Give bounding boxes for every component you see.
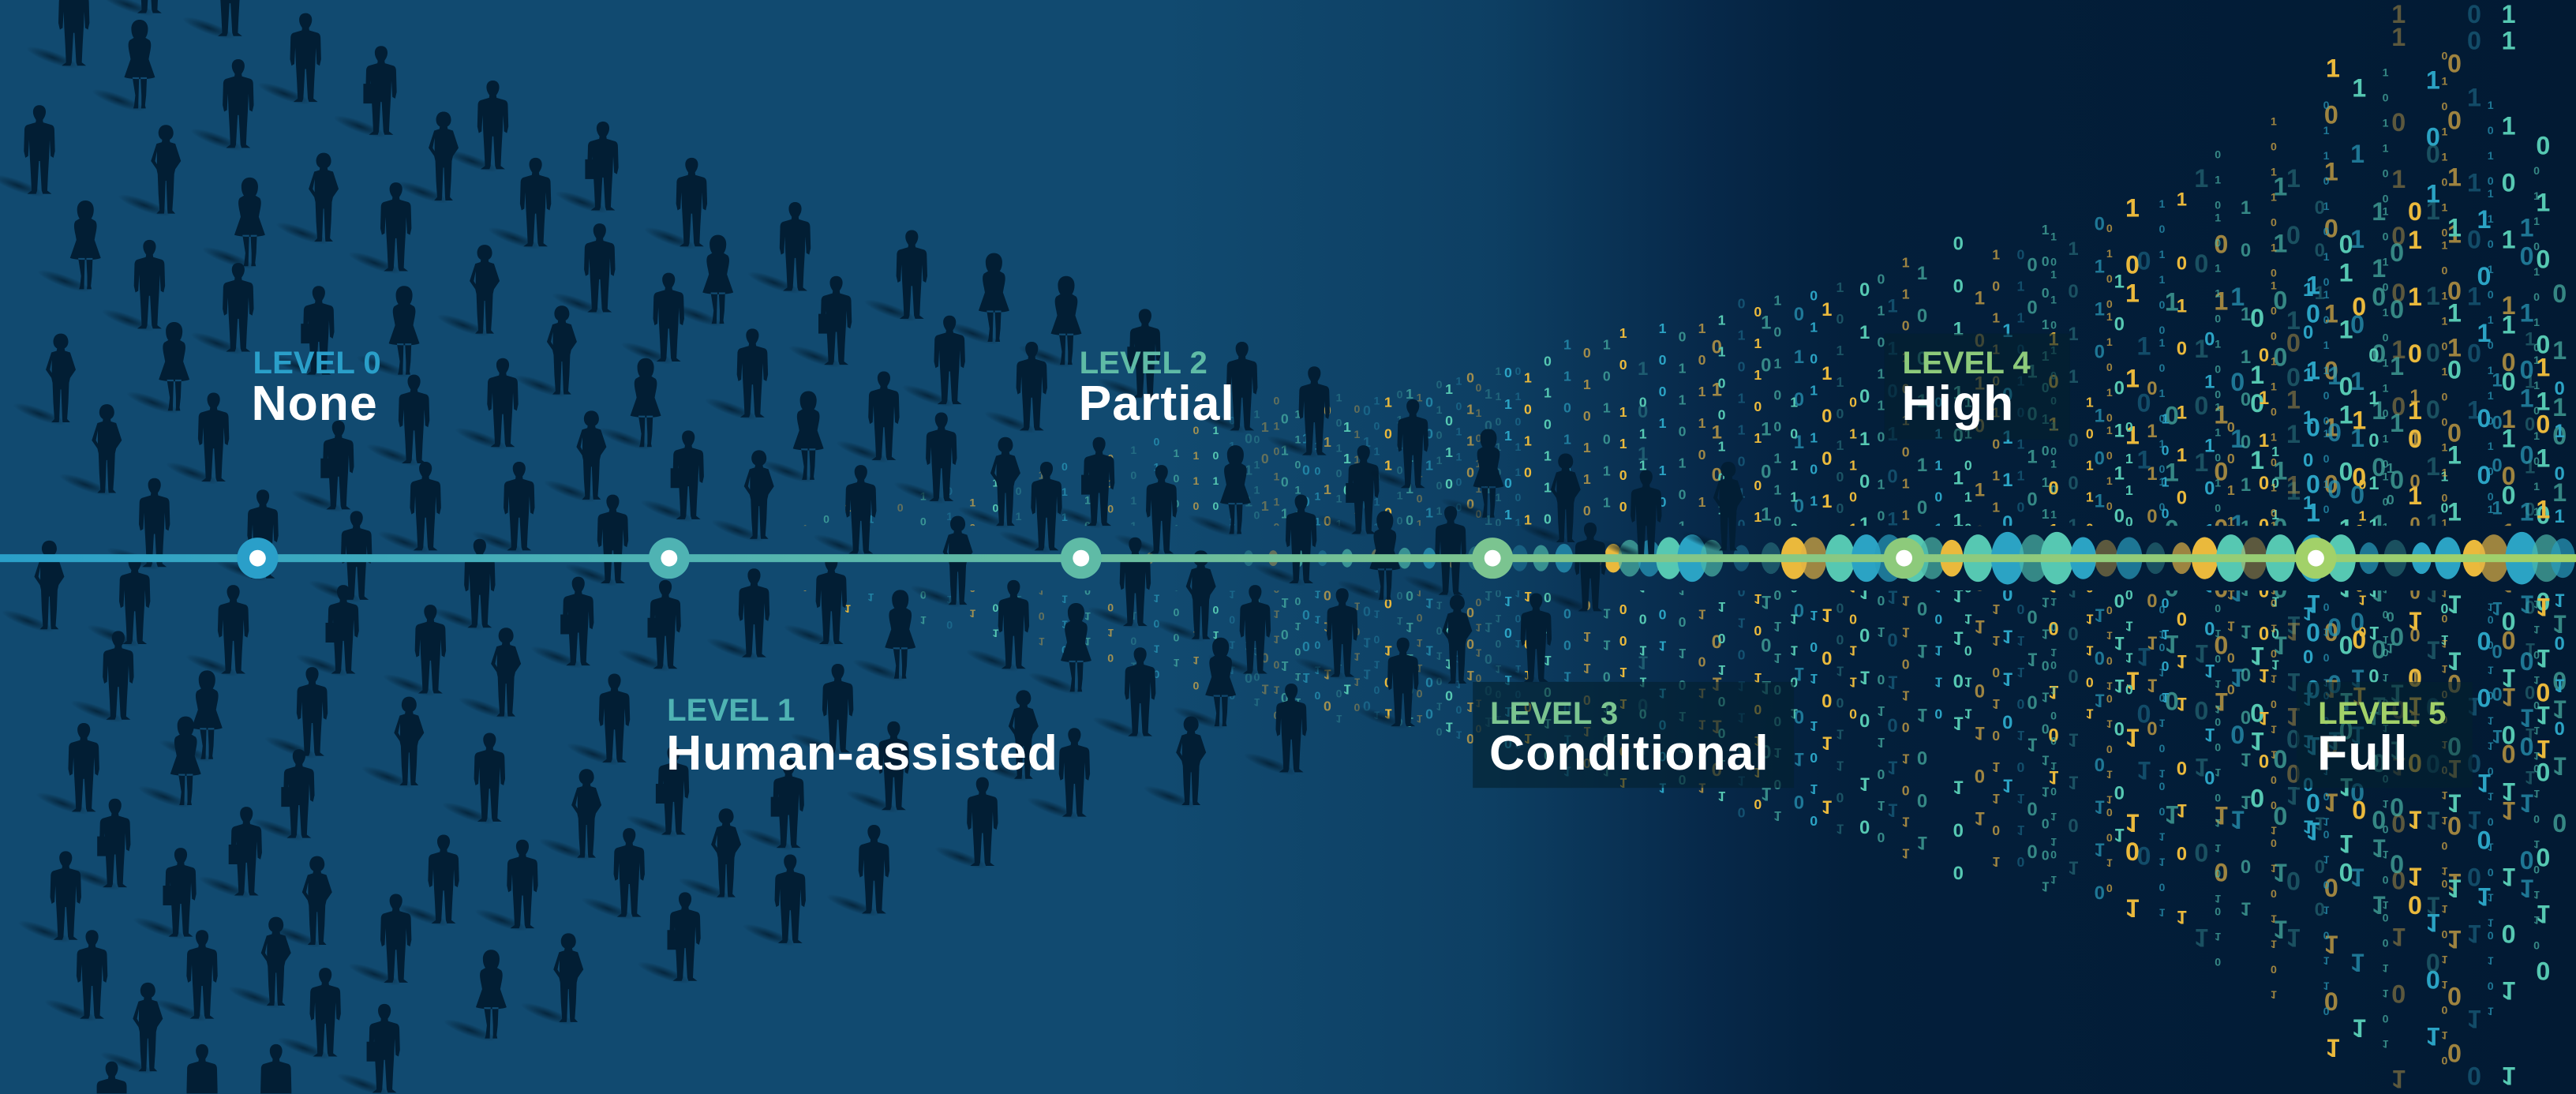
binary data stream: upper half columns of digits: 1 0 1 0 1 — [2529, 354, 2557, 638]
binary data stream: upper half columns of digits: 01 1 0 10 1 — [2401, 197, 2429, 510]
binary data stream: upper half columns of digits: 1 0 1 0 — [1035, 468, 1048, 556]
binary data stream: upper half columns of digits: 0 1 0 0 1 1 0 0 1 — [2529, 132, 2557, 643]
binary data stream: upper half columns of digits: 1 1 0 1 0 1 0 1 1 0 1 0 — [1898, 255, 1914, 618]
binary data stream: upper half columns of digits: 1 1 0 1 0 1 0 — [1291, 407, 1304, 571]
label: level 4 high: High — [1901, 376, 2014, 431]
binary data stream: upper half columns of digits: 0 1 — [773, 529, 785, 567]
binary data stream: upper half columns of digits: 0 1 1 0 1 — [2199, 328, 2220, 541]
timeline node: level 2 — [1061, 538, 1102, 579]
binary data stream: upper half columns of digits: 1 0 0 1 1 0 1 0 — [1481, 386, 1496, 623]
binary data stream: upper half columns of digits: 1 0 1 1 0 1 01 0 0 1 1 0 1 0 1 01 1 0 1 0 1 0 1 0 — [2267, 115, 2280, 734]
binary data stream: upper half columns of digits: 1 1 0 1 1 0 1 0 1 — [2495, 26, 2523, 566]
binary data stream: upper half columns of digits: 0 1 1 0 1 0 1 01 0 1 1 0 01 0 1 0 1 1 0 1 0 1 1 0 1 — [2320, 99, 2333, 743]
binary data stream: upper half columns of digits: 0 1 0 1 1 0 1 — [1270, 395, 1282, 559]
binary data stream: upper half columns of digits: 0 10 1 0 — [2243, 304, 2271, 560]
binary data stream: upper half columns of digits: 0 1 1 0 1 0 1 — [1350, 403, 1363, 567]
binary data stream: upper half columns of digits: 1 0 1 0 1 0 1 — [2187, 164, 2215, 619]
binary data stream: upper half columns of digits: 1 0 1 — [2267, 444, 2283, 523]
binary data stream: upper half columns of digits: 1 0 1 — [841, 501, 854, 564]
binary data stream: upper half columns of digits: 1 0 1 0 1 1 0 — [1370, 395, 1383, 559]
binary data stream: upper half columns of digits: 1 1 0 1 0 0 1 1 0 — [1559, 337, 1575, 605]
binary data stream: upper half columns of digits: 1 0 1 1 0 0 1 1 0 1 — [1616, 325, 1631, 641]
binary data stream: upper half columns of digits: 1 0 1 0 1 0 1 1 — [1520, 369, 1536, 622]
binary data stream: upper half columns of digits: 1 0 1 1 0 1 — [1250, 407, 1263, 546]
binary data stream: upper half columns of digits: 0 1 10 1 0 — [2545, 279, 2574, 564]
binary data stream: digits reaching the top edge: 1 — [2495, 0, 2523, 28]
binary data stream: upper half columns of digits: 0 1 1 0 1 — [1241, 430, 1256, 572]
binary data stream: upper half columns of digits: 1 0 1 0 1 0 — [2495, 263, 2523, 604]
binary data stream: upper half columns of digits: 1 0 1 1 0 1 0 1 — [1402, 386, 1417, 623]
label: level 5 full: LEVEL 5 — [2318, 695, 2446, 731]
binary data stream: upper half columns of digits: 10 1 01 0 1 — [2513, 214, 2541, 526]
label: level 5 full: Full — [2317, 725, 2408, 781]
binary data stream: upper half columns of digits: 0 1 0 1 0 — [2130, 246, 2159, 559]
binary data stream: upper half columns of digits: 0 1 1 0 — [2121, 419, 2137, 530]
binary data stream: upper half columns of digits: 1 0 1 0 1 1 — [1209, 424, 1222, 563]
binary data stream: upper half columns of digits: 1 0 1 0 1 1 0 — [1380, 395, 1396, 616]
binary data stream: upper half columns of digits: 1 0 1 1 0 01 0 1 0 1 0 1 1 0 1 01 0 1 1 0 1 0 1 0 1 1 0 — [2379, 66, 2392, 760]
binary data stream: upper half columns of digits: 1 0 1 0 — [2158, 410, 2174, 521]
binary data stream: upper half columns of digits: 1 — [2319, 54, 2347, 83]
binary data stream: upper half columns of digits: 0 1 1 0 1 0 1 1 — [1500, 365, 1516, 617]
binary data stream: upper half columns of digits: 1 0 1 0 1 — [2158, 287, 2186, 600]
binary data stream: upper half columns of digits: 1 0 0 1 1 — [1170, 447, 1182, 560]
binary data stream: upper half columns of digits: 1 0 0 1 1 0 1 — [2109, 271, 2130, 569]
binary data stream: upper half columns of digits: 0 1 1 — [1013, 485, 1025, 548]
binary data stream: upper half columns of digits: 1 0 1 1 0 — [1997, 320, 2018, 534]
binary data stream: upper half columns of digits: 1 0 1 1 0 — [1127, 444, 1140, 557]
binary data stream: upper half columns of digits: 0 1 0 01 1 0 1 01 0 1 0 1 1 0 1 1 0 1 — [2103, 222, 2116, 689]
binary data stream: upper half columns of digits: 1 0 1 1 0 1 1 — [2297, 279, 2319, 556]
binary data stream: upper half columns of digits: 1 0 0 1 1 0 — [1298, 430, 1314, 604]
binary data stream: upper half columns of digits: 1 0 1 0 — [989, 477, 1002, 565]
binary data stream: upper half columns of digits: 1 01 1 1 — [2118, 194, 2147, 450]
binary data stream: upper half columns of digits: 0 0 1 1 0 1 0 1 1 — [2383, 238, 2411, 750]
binary data stream: upper half columns of digits: 1 0 1 0 1 1 0 1 0 — [1599, 337, 1615, 621]
binary data stream: upper half columns of digits: 1 0 1 0 0 1 0 — [2384, 23, 2413, 421]
binary data stream: upper half columns of digits: 1 0 1 0 1 1 0 1 — [1333, 391, 1346, 580]
binary data stream: upper half columns of digits: 1 1 0 1 0 1 — [1882, 296, 1904, 530]
binary data stream: upper half columns of digits: 0 1 0 1 1 1 — [1150, 436, 1163, 575]
binary data stream: upper half columns of digits: 1 0 1 1 0 1 0 1 1 0 1 — [1988, 246, 2004, 578]
binary data stream: upper half columns of digits: 0 1 1 0 — [1058, 460, 1071, 549]
binary data stream: upper half columns of digits: 1 0 1 0 1 0 — [1969, 287, 1990, 543]
binary data stream: upper half columns of digits: 0 1 1 0 1 0 1 — [1320, 403, 1335, 624]
binary data stream: upper half columns of digits: 1 0 — [864, 512, 877, 550]
binary data stream: upper half columns of digits: 0 1 1 — [943, 485, 956, 548]
binary data stream: upper half columns of digits: 1 0 1 1 — [2223, 283, 2252, 538]
binary data stream: upper half columns of digits: 1 1 0 0 1 0 1 0 1 — [2266, 173, 2294, 713]
binary data stream: upper half columns of digits: 0 1 1 0 1 0 1 0 1 1 — [1675, 328, 1690, 628]
binary data stream: upper half columns of digits: 0 1 1 0 1 0 1 1 — [1359, 403, 1375, 639]
binary data stream: upper half columns of digits: 0 1 0 1 1 0 1 0 1 — [1540, 354, 1556, 638]
label: level 0 none: LEVEL 0 — [253, 345, 381, 380]
label: level 2 partial: Partial — [1079, 376, 1235, 431]
binary data stream: upper half columns of digits: 0 1 — [2354, 477, 2370, 524]
binary data stream: upper half columns of digits: 0 1 0 1 1 0 1 0 1 1 0 — [1734, 296, 1750, 628]
binary data stream: upper half columns of digits: 0 1 1 0 — [1706, 337, 1728, 486]
binary data stream: upper half columns of digits: 0 0 1 0 1 0 1 — [2021, 255, 2042, 553]
binary data stream: upper half columns of digits: 0 1 1 0 1 0 — [1189, 424, 1202, 563]
binary data stream: upper half columns of digits: 1 0 0 1 0 — [2487, 369, 2508, 561]
binary data stream: upper half columns of digits: 0 1 — [820, 512, 833, 550]
binary data stream: upper half columns of digits: 1 0 1 1 0 — [2082, 395, 2098, 537]
binary data stream: upper half columns of digits: 0 1 1 0 0 1 — [2207, 230, 2235, 599]
binary data stream: upper half columns of digits: 1 01 1 0 1 0 0 1 01 0 1 1 1 0 1 0 1 1 01 — [2047, 230, 2060, 735]
binary data stream: upper half columns of digits: 0 1 1 0 0 1 0 1 — [1462, 369, 1478, 606]
binary data stream: upper half columns of digits: 0 1 0 1 0 1 0 1 0 0 1 — [2317, 73, 2346, 755]
binary data stream: upper half columns of digits: 0 1 1 — [894, 501, 907, 564]
timeline node: level 4 — [1884, 538, 1925, 579]
binary data stream: upper half columns of digits: 0 1 0 1 1 0 1 1 0 1 0 — [1806, 287, 1822, 635]
binary data stream: upper half columns of digits: 0 1 1 0 1 0 1 — [1394, 388, 1406, 552]
label: level 3 conditional — [1473, 682, 1794, 788]
binary data stream: upper half columns of digits: 0 1 1 0 0 — [2253, 345, 2275, 537]
binary data stream: upper half columns of digits: 1 0 1 1 0 0 1 0 — [1452, 375, 1465, 564]
binary data stream: upper half columns of digits: 0 1 1 0 — [2141, 378, 2162, 527]
binary data stream: upper half columns of digits: 1 0 1 0 1 — [2043, 328, 2065, 541]
label: level 2 partial: LEVEL 2 — [1080, 345, 1208, 380]
binary data stream: digits reaching the top edge: 0 — [2460, 0, 2488, 28]
timeline node: level 1 — [649, 538, 690, 579]
binary data stream: upper half columns of digits: 1 1 0 1 0 1 0 1 — [1492, 365, 1504, 554]
binary data stream: upper half columns of digits: 0 1 0 1 1 — [1104, 451, 1117, 565]
binary data stream: upper half columns of digits: 1 — [2345, 74, 2373, 131]
glowing data bubbles along the timeline — [1081, 532, 2575, 584]
binary data stream: upper half columns of digits: 0 0 1 1 0 1 1 — [1421, 395, 1437, 616]
timeline node: level 3 — [1472, 538, 1513, 579]
binary data stream: upper half columns of digits: 0 1 0 1 1 — [2363, 345, 2384, 537]
binary data stream: upper half columns of digits: 1 0 0 1 1 0 1 0 1 1 0 1 — [2038, 222, 2054, 585]
binary data stream: upper half columns of digits: 1 0 1 1 0 1 0 0 1 1 1 — [1832, 279, 1848, 611]
binary data stream: upper half columns of digits: 1 0 1 — [2383, 460, 2398, 539]
label: level 2 partial — [1079, 345, 1235, 431]
binary data stream: upper half columns of digits: 1 0 1 0 1 1 0 1 — [2279, 164, 2308, 619]
binary data stream: upper half columns of digits: 1 1 0 0 1 — [1816, 299, 1837, 512]
binary data stream: upper half columns of digits: 0 1 0 1 1 0 1 1 0 — [1579, 345, 1595, 613]
binary data stream: upper half columns of digits: 1 0 0 1 1 — [2320, 362, 2349, 617]
crowd of people silhouettes — [0, 0, 1743, 1094]
binary data stream: digits reaching the top edge: 1 — [2384, 0, 2413, 28]
binary data stream: upper half columns of digits: 0 0 1 1 0 1 1 0 — [1948, 234, 1969, 575]
binary data stream: upper half columns of digits: 1 0 1 0 1 1 — [1755, 313, 1777, 568]
binary data stream: upper half columns of digits: 0 0 1 — [2309, 197, 2331, 325]
binary data stream: upper half columns of digits: 0 1 0 1 0 1 — [1788, 304, 1810, 560]
binary data stream: upper half columns of digits: 0 1 0 1 1 0 1 1 — [1511, 365, 1524, 554]
binary data stream: upper half columns of digits: 1 0 1 — [1632, 358, 1653, 465]
binary data stream: upper half columns of digits: 1 0 1 1 0 1 0 — [1413, 391, 1426, 555]
binary data stream: upper half columns of digits: 0 1 0 1 1 0 — [1311, 414, 1324, 553]
binary data stream: upper half columns of digits: 0 1 1 0 1 0 1 1 — [2089, 214, 2110, 555]
binary data stream: upper half columns of digits: 0 1 1 0 0 1 1 1 0 — [2419, 140, 2447, 651]
label: level 3 conditional: Conditional — [1489, 725, 1769, 781]
label: level 1 human-assisted: Human-assisted — [666, 725, 1058, 781]
binary data stream: upper half columns of digits: 1 1 0 1 — [1081, 468, 1094, 556]
binary data stream: upper half columns of digits: 1 10 0 1 0 1 1 — [2364, 197, 2393, 595]
binary data stream: upper half columns of digits: 0 1 1 0 1 0 1 — [1226, 414, 1238, 579]
binary data stream: digits reaching the top edge — [2384, 0, 2523, 28]
binary data stream: upper half columns of digits: 0 1 0 1 — [2549, 378, 2570, 527]
binary data stream: upper half columns of digits: 0 1 0 1 0 1 1 0 — [1433, 378, 1446, 568]
label: level 5 full — [2297, 682, 2473, 788]
binary data stream: upper half columns of digits: 1 1 0 1 1 0 1 — [2440, 214, 2469, 640]
binary data stream: upper half columns of digits: 1 1 0 1 0 — [1960, 395, 1976, 537]
label: level 4 high — [1885, 334, 2070, 440]
binary data stream: upper half columns of digits: 1 1 0 1 1 0 0 — [2343, 140, 2372, 566]
binary data stream: upper half columns of digits: 1 0 1 0 0 — [2469, 205, 2498, 489]
label: level 3 conditional: LEVEL 3 — [1490, 695, 1618, 731]
binary data stream: upper half columns of digits: 1 0 1 — [917, 489, 930, 553]
binary data stream: upper half columns of digits: 0 1 0 1 1 0 0 — [1277, 410, 1293, 616]
binary data stream: upper half columns of digits: 1 0 1 1 0 — [1786, 395, 1802, 537]
binary data stream: upper half columns of digits: 1 1 0 0 — [2405, 386, 2425, 535]
binary data stream: upper half columns of digits: 1 0 1 0 1 1 0 1 1 — [2171, 189, 2192, 594]
binary data stream: upper half columns of digits: 1 0 1 0 1 0 — [1257, 419, 1273, 609]
binary data stream: upper half columns of digits: 1 0 1 — [966, 496, 979, 560]
binary data stream: upper half columns of digits: 0 1 0 1 0 1 — [1854, 279, 1875, 535]
binary data stream: upper half columns of digits — [773, 23, 2574, 769]
binary data stream: upper half columns of digits: 1 1 0 1 0 1 — [1339, 419, 1355, 609]
binary data stream: upper half columns of digits: 10 1 0 01 1 — [2299, 271, 2327, 583]
binary data stream: upper half columns of digits: 1 0 1 — [2419, 66, 2447, 236]
binary data stream: upper half columns of digits: 0 1 1 0 1 0 1 01 1 0 1 0 1 1 0 1 0 1 0 1 — [2530, 164, 2543, 669]
binary data stream: mirrored lower half — [773, 347, 2574, 1093]
binary data stream: upper half columns of digits: 1 0 1 1 0 0 1 1 — [2063, 238, 2084, 579]
binary data stream: upper half columns of digits: 1 0 1 1 0 0 1 1 0 — [2235, 197, 2256, 581]
binary data stream: upper half columns of digits: 1 0 1 0 0 1 1 0 1 0 1 — [1769, 293, 1785, 624]
binary data stream: upper half columns of digits: 0 1 1 0 1 0 1 — [2460, 26, 2488, 424]
binary data stream: upper half columns of digits: 0 1 1 0 1 — [1845, 395, 1861, 537]
label: level 1 human-assisted — [666, 692, 1058, 781]
binary data stream: upper half columns of digits: 1 0 1 01 1 0 1 0 1 0 1 1 0 1 0 01 1 0 1 0 1 1 0 1 — [2484, 99, 2497, 717]
binary data stream: upper half columns of digits: 1 0 0 1 1 0 1 1 0 1 — [1655, 320, 1671, 636]
binary data stream: upper half columns of digits: 0 1 0 1 1 — [2345, 293, 2373, 605]
label: level 1 human-assisted: LEVEL 1 — [667, 692, 795, 728]
binary data stream: upper half columns of digits: 0 1 1 0 1 0 1 0 1 1 — [1750, 304, 1765, 620]
binary data stream: upper half columns of digits: 1 0 — [2436, 468, 2452, 515]
binary data stream: upper half columns of digits: 01 1 01 0 1 — [2332, 230, 2361, 542]
timeline line — [0, 554, 2576, 562]
binary data stream: upper half columns of digits: 0 1 0 1 1 0 1 01 0 1 1 0 1 0 0 1 1 0 1 01 0 1 1 0 1 0 1 1 — [2438, 49, 2451, 769]
binary data stream: upper half columns of digits: 1 0 1 0 1 1 0 1 — [1441, 381, 1457, 634]
binary data stream: upper half columns of digits: 1 0 0 1 1 0 1 — [1911, 263, 1933, 561]
binary data stream: upper half columns of digits: 0 1 1 0 1 — [1930, 395, 1946, 537]
binary data stream: upper half columns of digits: 0 1 1 0 1 0 — [1635, 395, 1651, 568]
binary data stream: upper half columns of digits: 0 1 0 1 1 0 1 0 1 1 0 — [1873, 271, 1889, 618]
binary data stream: upper half columns of digits: 0 1 1 0 1 0 1 1 0 1 0 — [2012, 246, 2028, 578]
binary data stream: upper half columns of digits: 0 1 1 0 — [2279, 328, 2308, 556]
label: level 4 high: LEVEL 4 — [1903, 345, 2031, 380]
binary data stream: upper half columns of digits: 1 1 0 0 1 0 1 1 0 1 — [1714, 313, 1730, 613]
binary data stream: upper half columns of digits: 1 0 1 1 0 01 0 1 0 1 01 0 1 1 0 1 0 1 0 1 — [2155, 197, 2168, 715]
binary data stream: upper half columns of digits: 0 1 01 0 1 1 0 1 0 01 1 0 1 0 1 1 0 1 0 1 01 0 — [2211, 148, 2224, 729]
binary data stream: upper half columns of digits: 1 0 1 1 0 1 0 1 0 — [1694, 320, 1710, 605]
label: level 0 none — [251, 345, 381, 431]
label: level 0 none: None — [251, 376, 378, 431]
timeline node: level 5 — [2295, 538, 2336, 579]
binary data stream: upper half columns of digits: 0 1 0 1 1 0 1 — [1472, 381, 1485, 545]
binary data stream: upper half columns of digits: 1 1 0 1 0 — [2519, 328, 2540, 520]
binary data stream: upper half columns of digits: 1 0 — [799, 523, 811, 560]
binary data stream: upper half columns of digits: 0 0 1 1 0 1 0 — [2440, 49, 2469, 447]
binary data stream: upper half columns of digits: 0 0 1 1 — [2223, 419, 2239, 530]
timeline node: level 0 — [237, 538, 278, 579]
